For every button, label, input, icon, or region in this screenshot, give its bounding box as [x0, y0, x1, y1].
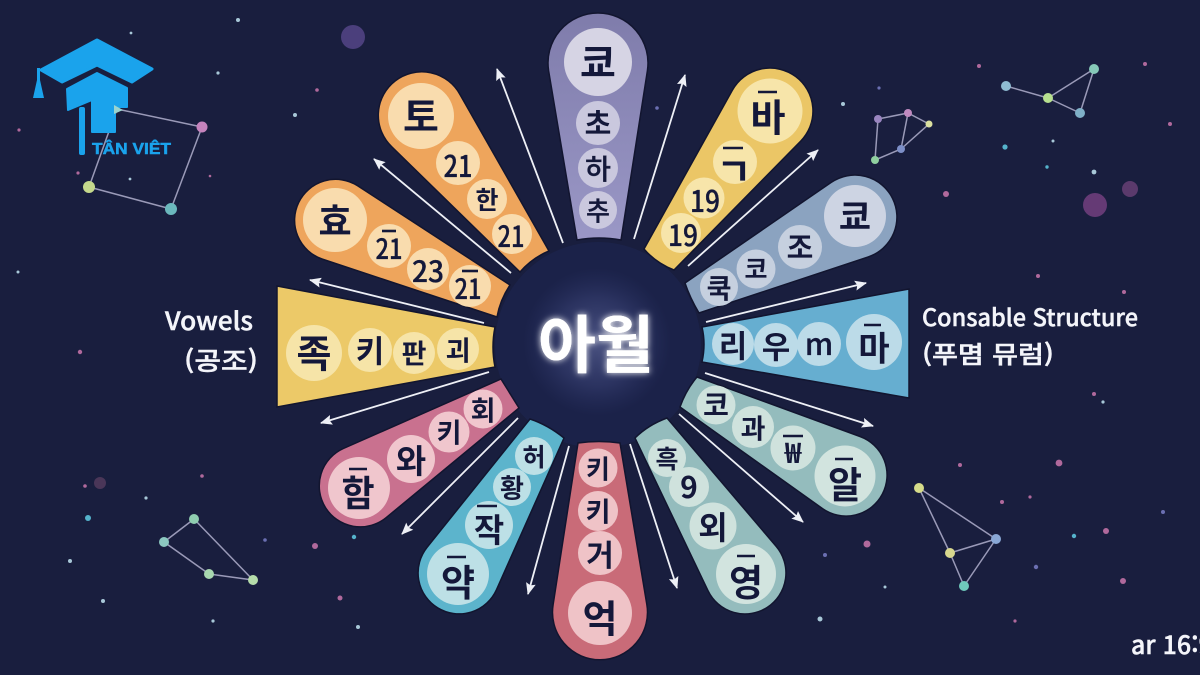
petal: sage lower: 흑 — [655, 440, 679, 476]
petal: pink lower left — [319, 379, 519, 527]
petal: teal lower left: 작 — [474, 504, 504, 552]
petal: steel blue right: 코 — [744, 250, 768, 286]
petal: sage lower right: 알 — [828, 455, 862, 509]
constellation node over logo — [114, 105, 123, 114]
petal: pink lower left: 키 — [437, 412, 461, 450]
petal: orange left: 효 — [318, 193, 352, 245]
petal: blue right: 마 — [858, 322, 890, 370]
petal: orange left — [295, 179, 510, 317]
petal: steel blue right: 쿄 — [839, 190, 871, 240]
petal: orange upper left: 토 — [403, 87, 439, 143]
arrows — [310, 69, 873, 594]
icon: graduation cap — [41, 40, 152, 82]
petal: sage lower: 9 — [680, 463, 698, 507]
petal: purple top: 쿄 — [580, 33, 616, 89]
petal: teal lower left — [418, 419, 564, 614]
label: consable structure — [922, 299, 1138, 370]
petal: sage lower right: ₩ — [784, 432, 803, 472]
petal: steel blue right: 조 — [787, 225, 813, 267]
center hub — [495, 242, 701, 448]
constellation: lower left — [159, 514, 258, 585]
petal: blue right — [702, 289, 909, 398]
petal: yellow left: 키 — [356, 326, 384, 372]
icon: upward arrow — [67, 73, 127, 132]
label: consable structure: Consable Structure — [922, 299, 1138, 333]
petal: red bottom: 키 — [586, 450, 610, 486]
label: vowels: (공조) — [184, 342, 258, 378]
petal: yellow upper right: 19 — [668, 213, 698, 255]
petal: yellow left: 족 — [297, 324, 331, 378]
petal: sage lower right: 과 — [741, 408, 766, 446]
hub title: 아월 — [538, 296, 654, 386]
petal: pink lower left: 회 — [471, 390, 495, 428]
label: consable structure: (푸몀 뮤럼) — [922, 335, 1054, 370]
petal: yellow left — [277, 286, 495, 407]
label: vowels — [164, 302, 258, 378]
petal: teal lower left: 약 — [441, 553, 475, 607]
label: vowels: Vowels — [164, 302, 253, 338]
petal: purple top — [548, 13, 648, 240]
icon: tassel — [33, 68, 44, 98]
petal: blue right: 리 — [719, 322, 747, 366]
petal: sage lower: 외 — [698, 503, 728, 549]
petal: purple top: 하 — [585, 148, 611, 188]
petal: sage lower — [635, 418, 786, 614]
petal: blue right: m — [805, 320, 833, 364]
petal: sage lower right: 코 — [703, 384, 729, 424]
petal: red bottom — [552, 442, 647, 660]
petal: red bottom: 키 — [586, 490, 610, 530]
petal: red bottom: 억 — [583, 588, 617, 644]
logo text: TÂN VIÊT — [92, 139, 171, 158]
petal: yellow upper right — [644, 68, 813, 270]
petal: purple top: 초 — [585, 101, 611, 143]
petal: purple top: 추 — [586, 192, 610, 228]
petal: orange left: 21 — [454, 268, 482, 308]
petal: pink lower left: 함 — [341, 465, 375, 517]
constellation: upper right small — [871, 109, 932, 164]
petal: pink lower left: 와 — [396, 435, 426, 483]
petal: orange left: 23 — [412, 249, 444, 291]
petal: yellow left: 판 — [402, 332, 427, 372]
petal: orange left: 21 — [376, 228, 402, 268]
petal: blue right: 우 — [762, 322, 790, 368]
petal: teal lower left: 허 — [522, 438, 546, 474]
petal: steel blue right — [685, 175, 897, 313]
hub glow — [523, 268, 671, 416]
constellation: upper right large — [1001, 64, 1099, 118]
petal: yellow upper right: 19 — [690, 177, 720, 221]
petal: teal lower left: 황 — [500, 468, 524, 506]
constellation: lower right — [914, 483, 1001, 591]
petal: orange upper left: 한 — [475, 181, 499, 217]
petal: orange upper left: 21 — [498, 214, 524, 256]
petal: yellow left: 괴 — [446, 330, 470, 368]
logo: Tan Viet — [33, 40, 171, 158]
petal: orange upper left: 21 — [444, 142, 472, 186]
icon: logo bar — [79, 107, 85, 155]
constellation: top left — [83, 109, 208, 215]
petal: yellow upper right: ㄱ — [717, 142, 751, 196]
petal: steel blue right: 쿡 — [707, 268, 731, 306]
petal: sage lower right — [680, 377, 887, 516]
petal: orange upper left — [378, 72, 549, 272]
petal: yellow upper right: 바 — [751, 88, 786, 142]
petal: sage lower: 영 — [729, 553, 763, 607]
petal: red bottom: 거 — [586, 531, 614, 575]
